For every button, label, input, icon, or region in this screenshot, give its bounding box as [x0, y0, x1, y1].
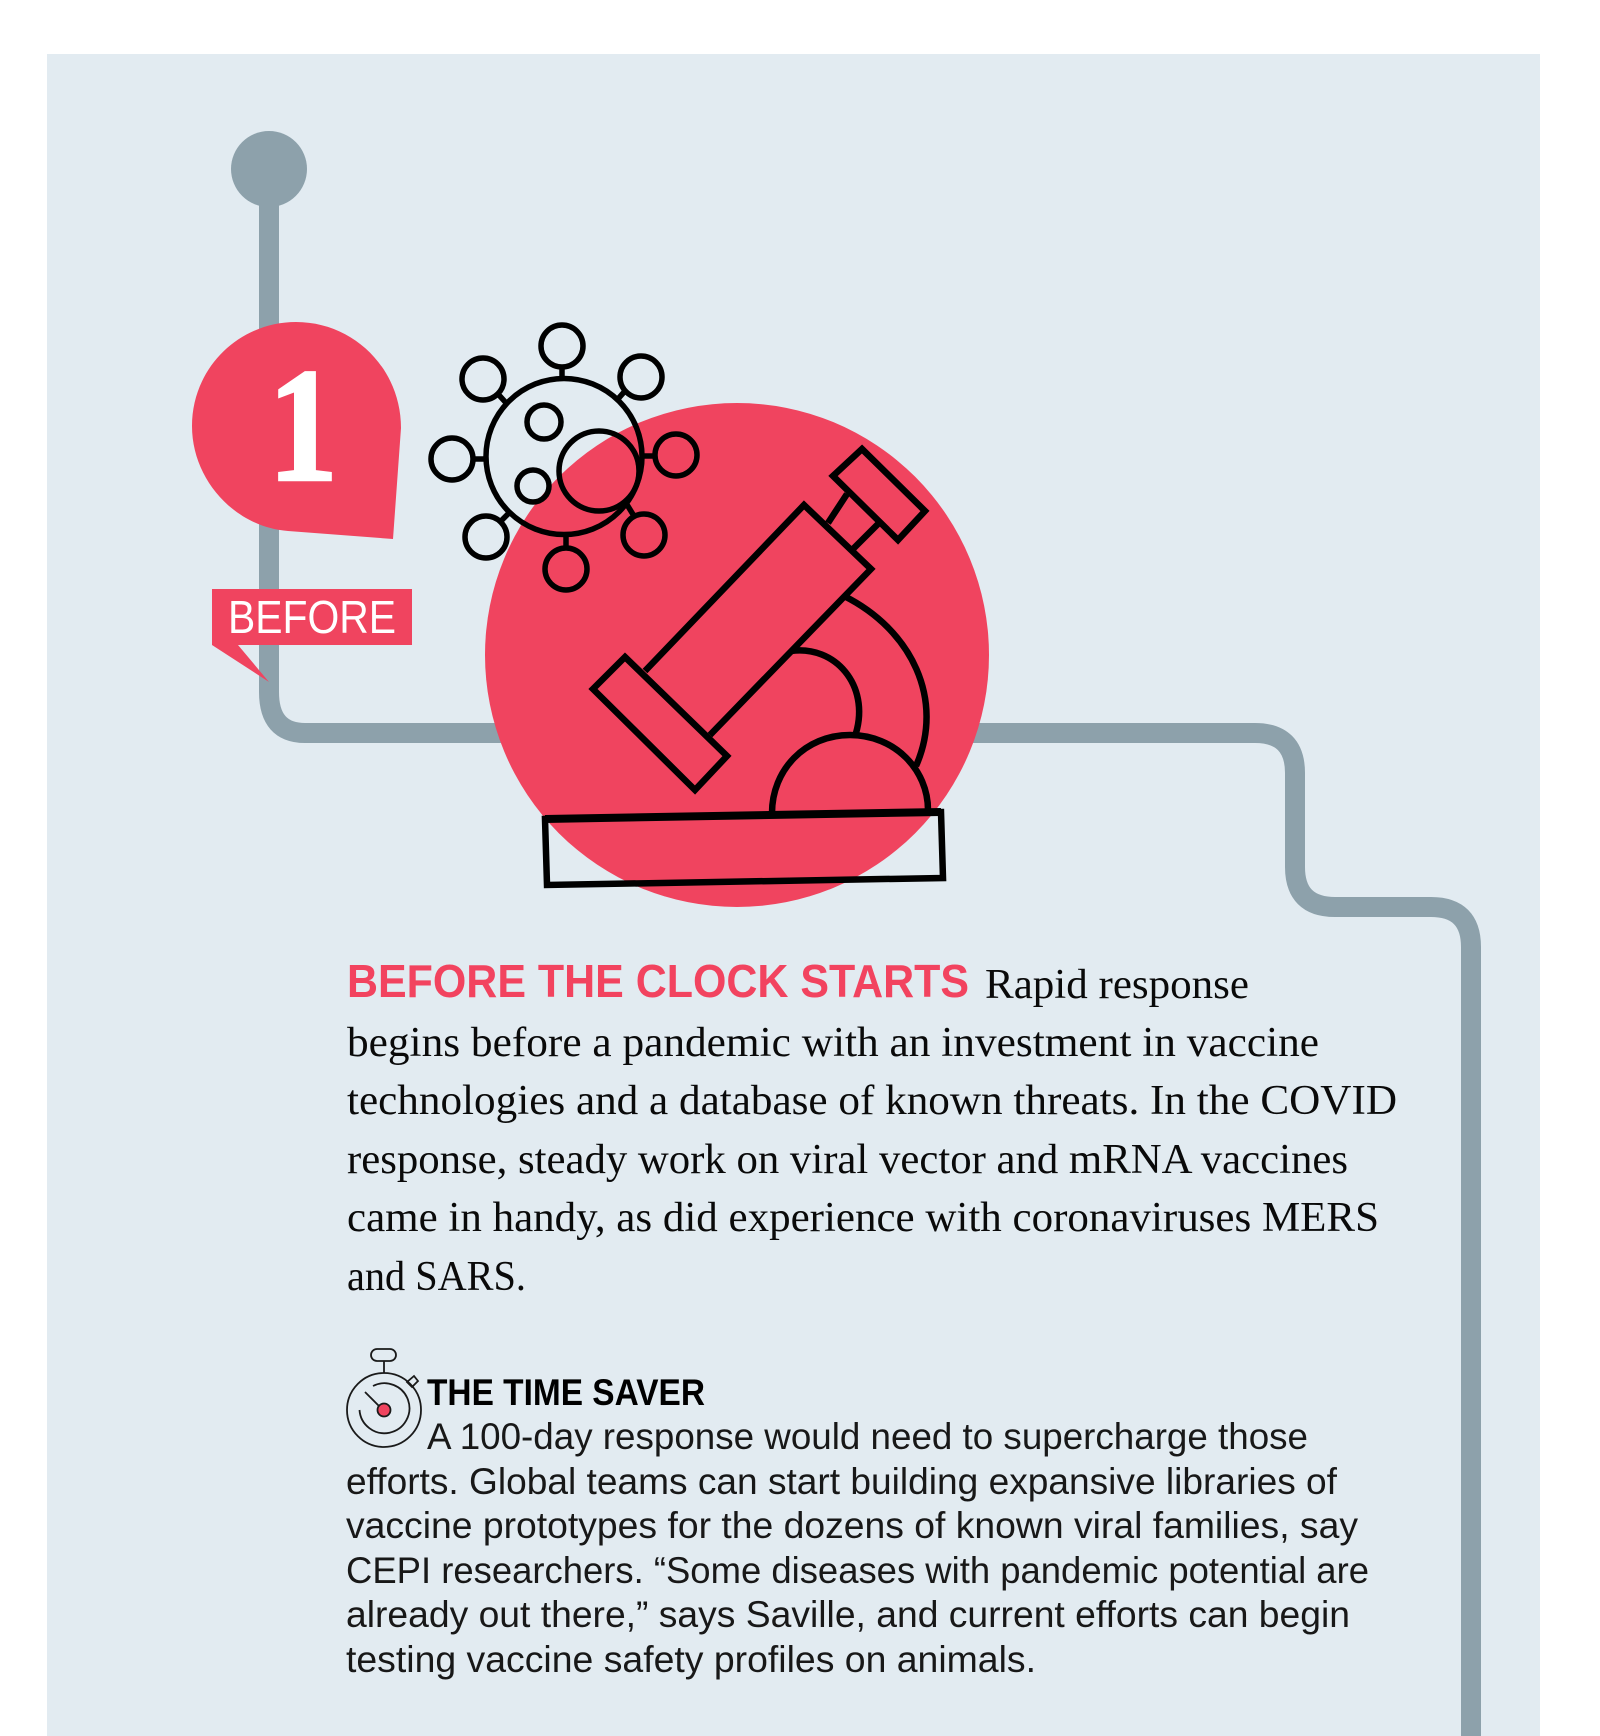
main text block [347, 955, 1397, 1300]
time saver text block: CEPI researchers. “Some diseases with pandemic potential are [346, 1550, 1369, 1591]
icon: stopwatch [347, 1349, 421, 1447]
eyepiece [833, 449, 925, 540]
red background circle [485, 403, 989, 907]
icon: virus [431, 325, 697, 590]
timeline path [231, 131, 1471, 1736]
main text block: response, steady work on viral vector and mRNA vaccines [347, 1137, 1348, 1183]
inner arm [791, 650, 859, 733]
objective plate [593, 657, 727, 790]
time saver lines: A 100-day response would need to supercharge those [427, 1416, 1308, 1457]
tag label: BEFORE [228, 591, 396, 643]
main text block: begins before a pandemic with an investment in vaccine [347, 1020, 1319, 1066]
time saver text block: vaccine prototypes for the dozens of known viral families, say [346, 1505, 1358, 1546]
number bubble [192, 322, 401, 539]
neck [828, 494, 879, 549]
before tag [212, 589, 412, 682]
main text block: technologies and a database of known threats. In the COVID [347, 1078, 1397, 1124]
time saver text block [346, 1372, 1369, 1680]
dome [772, 735, 928, 813]
time saver text block: already out there,” says Saville, and current efforts can begin [346, 1594, 1350, 1635]
time saver text block: efforts. Global teams can start building expansive libraries of [346, 1461, 1338, 1502]
icon: microscope [545, 449, 943, 885]
time saver heading: THE TIME SAVER [427, 1372, 705, 1413]
outer arm [844, 596, 927, 766]
heading: BEFORE THE CLOCK STARTS [347, 955, 969, 1007]
base [545, 812, 943, 885]
intro lines: Rapid response [985, 962, 1249, 1008]
tube [645, 505, 871, 735]
step number: 1 [268, 336, 338, 516]
main text block: and SARS. [347, 1254, 526, 1300]
time saver text block: testing vaccine safety profiles on animals. [346, 1639, 1036, 1680]
main text block: came in handy, as did experience with coronaviruses MERS [347, 1195, 1379, 1241]
